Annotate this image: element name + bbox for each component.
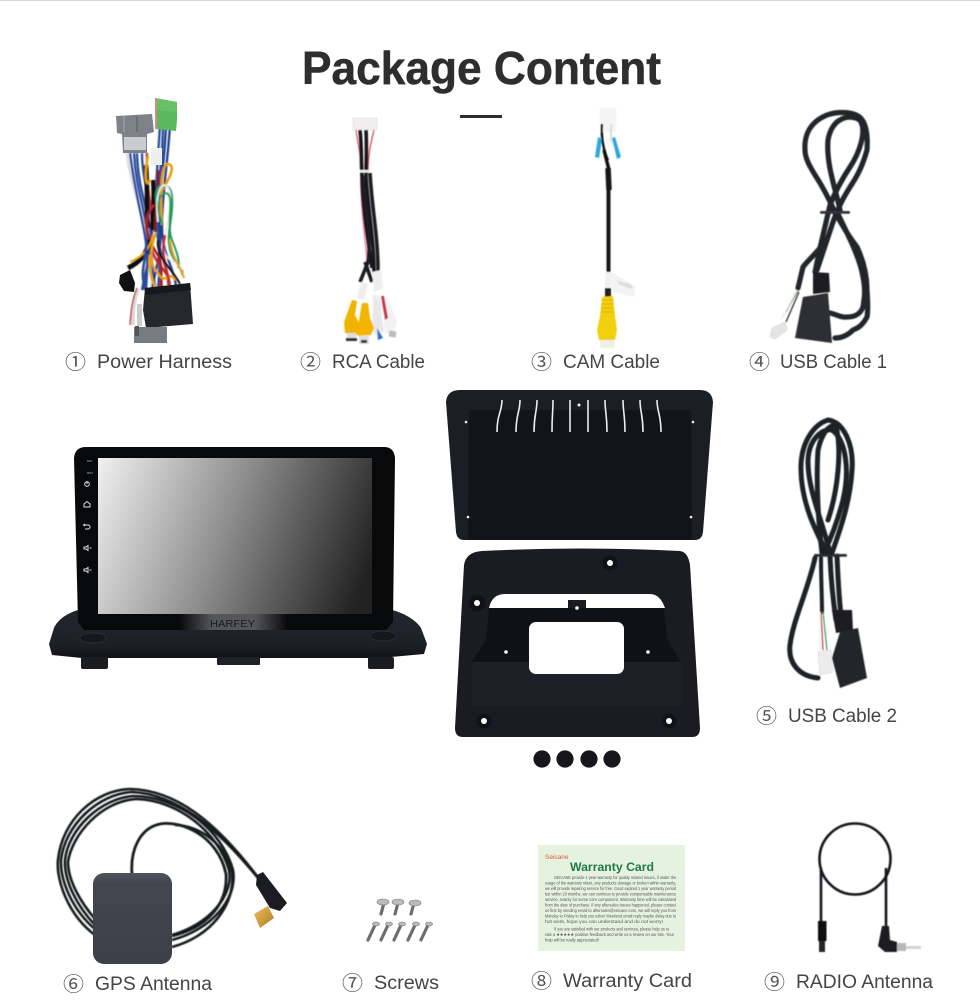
bezel [74,447,395,630]
warranty card panel: we will provide repairing service for free. Good expired 1 year warranty period [545,886,676,891]
warranty card panel: from the date of purchase. If any aftersales issues happened, please contact [545,902,677,908]
icon: CAM cable: YK093 [616,280,633,291]
cutouts [489,594,665,608]
label: RCA cable: ② [300,346,321,375]
icons: side buttons: MIC [87,459,93,463]
icon: antenna body [93,873,172,964]
label: power harness: Power Harness [97,352,232,373]
item 4: USB cable 1 [749,112,887,375]
icon: green connector [155,98,177,131]
mounts and feet [80,631,396,669]
screw holes [465,404,694,518]
warranty card panel: Seicane [545,854,569,861]
item 2: RCA cable [300,118,425,375]
icon: USB cable 2 [790,420,867,688]
warranty card panel: usage of the warranty sheet, any products damage or broken within warranty, [545,880,676,886]
label: warranty card: ⑧ [531,965,552,994]
label: warranty card: Warranty Card [563,971,692,992]
label: USB cable 1 [749,346,887,375]
screen gradient [98,458,372,614]
icon: CAM cable [595,108,635,348]
item 7: screws [342,899,439,996]
icons: side buttons: RST [87,471,93,475]
label: radio antenna: RADIO Antenna [796,972,933,993]
icon: grey connector [116,114,162,165]
item: head unit screen [49,447,427,669]
label: USB cable 1: USB Cable 1 [780,352,887,373]
item 3: CAM cable [531,108,660,375]
label: USB cable 2 [756,700,897,729]
warranty card panel: hot work, hope you can understand and do not worry! [545,919,663,924]
label: CAM cable [531,346,660,375]
item 5: USB cable 2 [756,420,897,729]
label: GPS antenna: ⑥ [63,968,84,997]
label: GPS antenna: GPS Antenna [95,974,212,995]
label: radio antenna: ⑨ [764,966,785,995]
title: Package Content [302,42,661,94]
item 9: radio antenna [764,824,933,995]
label: screws: Screws [374,973,439,994]
label: warranty card [531,965,692,994]
item: lower bracket panel [455,548,700,737]
icon: RCA cable [344,118,397,344]
icon: antenna cable [58,789,260,947]
warranty card panel: us first by sending email to aftersales@seicane.com, we will reply you from [545,908,676,913]
wires on upper panel [497,400,661,432]
label: radio antenna [764,966,933,995]
warranty card panel [538,845,685,951]
title [302,42,661,118]
label: screws [342,967,439,996]
warranty card panel: but within 18 months, we can continue to provide compensable maintenance [545,892,676,896]
warranty card panel: rate a ★★★★★ positive feedback and write us a review on our site. Your [545,932,674,937]
label: USB cable 2: USB Cable 2 [788,706,897,727]
label: power harness [65,346,232,375]
label: GPS antenna [63,968,212,997]
icon: USB cable 1 [770,112,868,343]
item: upper bracket panel [446,390,713,540]
warranty card panel: help will be really appreciated! [545,938,599,942]
icon: power harness wires [127,125,184,325]
mount holes [468,556,676,728]
item 1: power harness [65,98,232,375]
brand strip [180,614,287,630]
icons: side buttons [84,459,93,572]
label: USB cable 2: ⑤ [756,700,777,729]
item 8: warranty card [531,845,692,994]
label: RCA cable [300,346,425,375]
label: CAM cable: ③ [531,346,552,375]
label: USB cable 1: ④ [749,346,770,375]
icon: black module box [119,270,193,343]
icon: radio antenna [818,824,921,952]
label: RCA cable: RCA Cable [332,352,425,373]
warranty card panel: SEICANE provide 1 year warranty for quality related issues, if under the [554,875,676,880]
item 6: GPS antenna [58,789,287,997]
warranty card panel: If you are satisfied with our products and services, please help us to [554,926,669,932]
warranty card panel: service, mainly for some core component. Warranty time will be calculated [545,897,676,902]
base plate [49,610,427,658]
icon: screws [368,899,432,940]
brand strip: HARFEY [210,618,255,630]
label: power harness: ① [65,346,86,375]
item: rubber pads [533,750,621,768]
label: CAM cable: CAM Cable [563,352,660,373]
icon: right-angle connector [254,872,287,928]
label: screws: ⑦ [342,967,363,996]
warranty card panel: Monday to Friday to help you solve! Weekend email reply maybe delay due to [545,914,676,918]
warranty card panel: Warranty Card [570,860,654,874]
